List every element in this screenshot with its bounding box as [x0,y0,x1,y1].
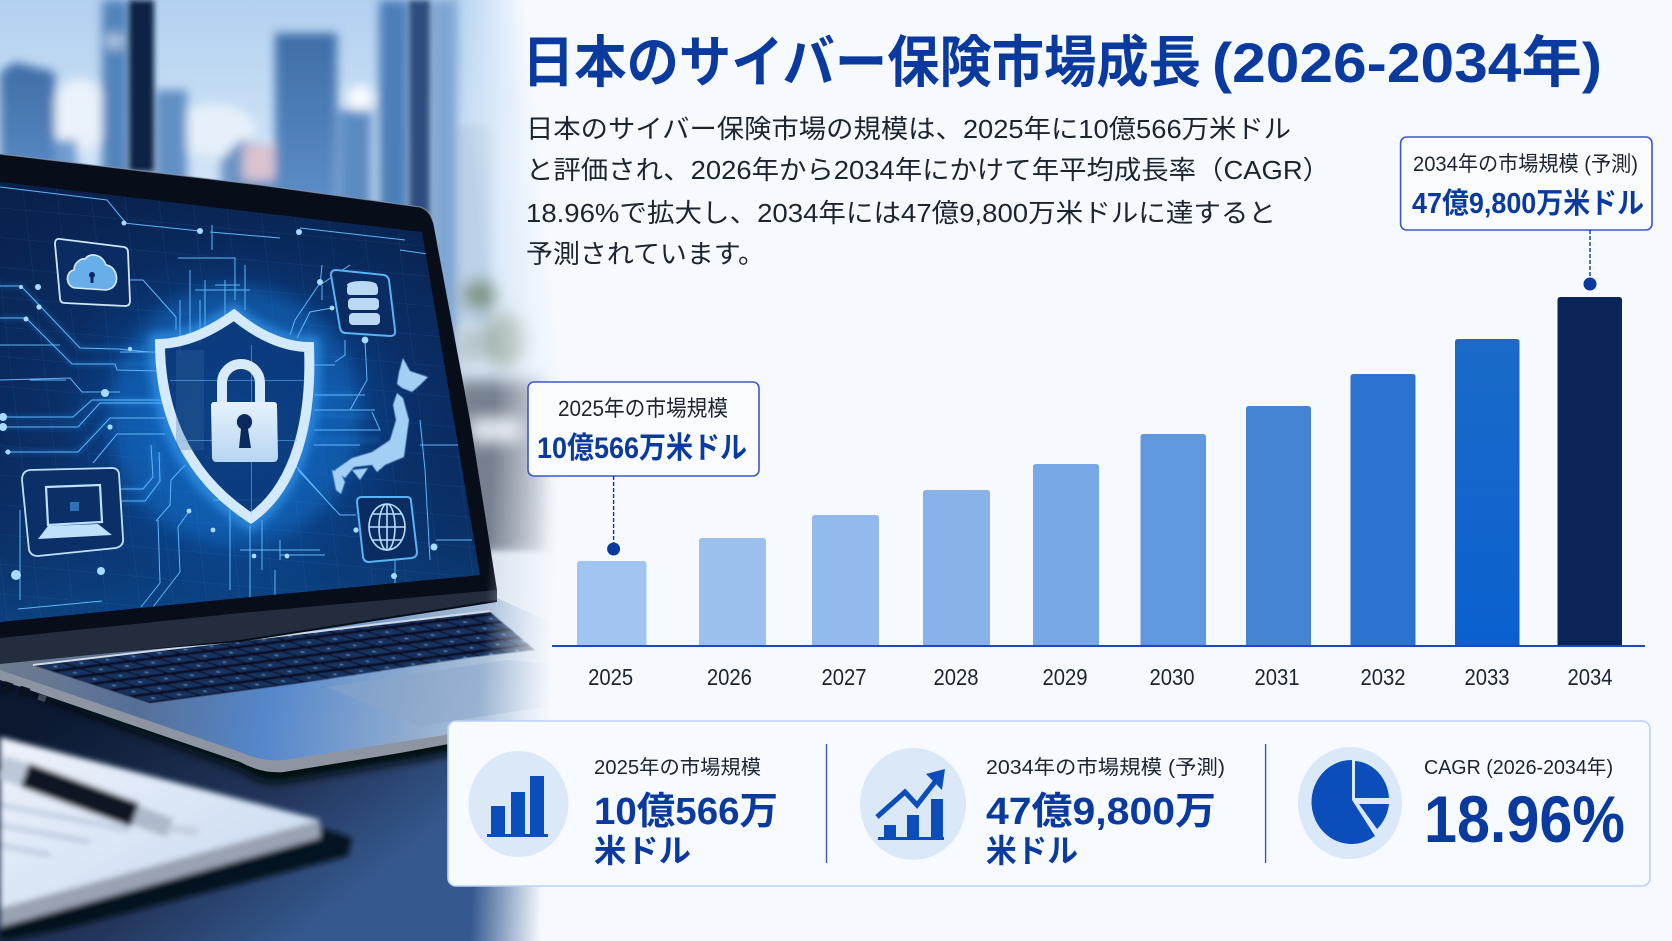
title: 日本のサイバー保険市場成長 [522,31,1201,94]
laptop lid [0,154,497,662]
description text: 予測されています。 [526,239,765,269]
circuit traces [0,187,472,609]
callout: 2025 market size: 2025年の市場規模 [558,396,728,421]
metric: 2034 market size forecast [860,748,1225,869]
year labels: 2030 [1150,664,1194,690]
circuit traces glow [0,286,380,501]
callout: 2034 market size forecast: 2034年の市場規模 (予測) [1413,153,1638,176]
axis line [552,645,1645,647]
year labels [588,664,1613,690]
year labels: 2027 [822,664,866,690]
icon: cloud lock [55,239,130,306]
metric: CAGR [1298,747,1625,859]
photo fade into page background: upper [400,0,1672,400]
photo: notebook and pen [0,737,352,941]
year labels: 2032 [1360,664,1406,690]
year labels: 2028 [934,664,978,690]
metric: CAGR: 18.96% [1424,782,1625,856]
padlock icon [211,364,278,462]
icon: growth chart [860,748,966,860]
year labels: 2025 [588,664,633,690]
description text: 日本のサイバー保険市場の規模は、2025年に10億566万米ドル [526,114,1291,144]
icon: bar chart [468,751,568,857]
metric: 2034 market size forecast: 米ドル [986,833,1078,869]
year labels: 2031 [1254,664,1300,690]
photo: desk surface [0,640,590,941]
description text [526,114,1330,269]
metric: CAGR: CAGR (2026-2034年) [1424,756,1613,779]
panel: key metrics [448,721,1650,886]
shield icon [154,309,315,525]
callout: 2034 market size forecast [1401,137,1652,290]
title: (2026-2034年) [1212,31,1602,94]
bars [577,297,1622,646]
metric: 2025 market size: 米ドル [594,833,691,869]
photo: laptop [0,154,590,783]
description text: 18.96%で拡大し、2034年には47億9,800万米ドルに達すると [526,198,1276,228]
laptop base [0,598,590,783]
icon: globe [357,497,417,562]
title [522,31,1602,94]
metric: 2025 market size: 10億566万 [594,791,778,833]
photo: blurred city skyline through window [0,0,590,642]
description text: と評価され、2026年から2034年にかけて年平均成長率（CAGR） [526,155,1330,185]
icon: pie chart [1298,747,1402,859]
metric: 2034 market size forecast: 47億9,800万 [986,791,1216,833]
icon: Japan map [332,358,428,494]
circuit nodes [0,220,438,580]
year labels: 2026 [707,664,752,690]
callout: 2034 market size forecast: 47億9,800万米ドル [1412,187,1644,220]
callout: 2025 market size [528,382,759,556]
callout: 2025 market size: 10億566万米ドル [537,432,747,465]
icon: database [331,270,395,336]
metric: 2025 market size: 2025年の市場規模 [594,756,761,779]
photo fade into page background: lower [400,400,1672,941]
year labels: 2029 [1042,664,1088,690]
year labels: 2033 [1464,664,1510,690]
icon: laptop box [22,468,123,556]
bar chart [552,297,1645,690]
laptop screen [0,180,490,625]
metric: 2025 market size [468,751,778,869]
metric: 2034 market size forecast: 2034年の市場規模 (予測) [986,756,1225,779]
year labels: 2034 [1568,664,1613,690]
